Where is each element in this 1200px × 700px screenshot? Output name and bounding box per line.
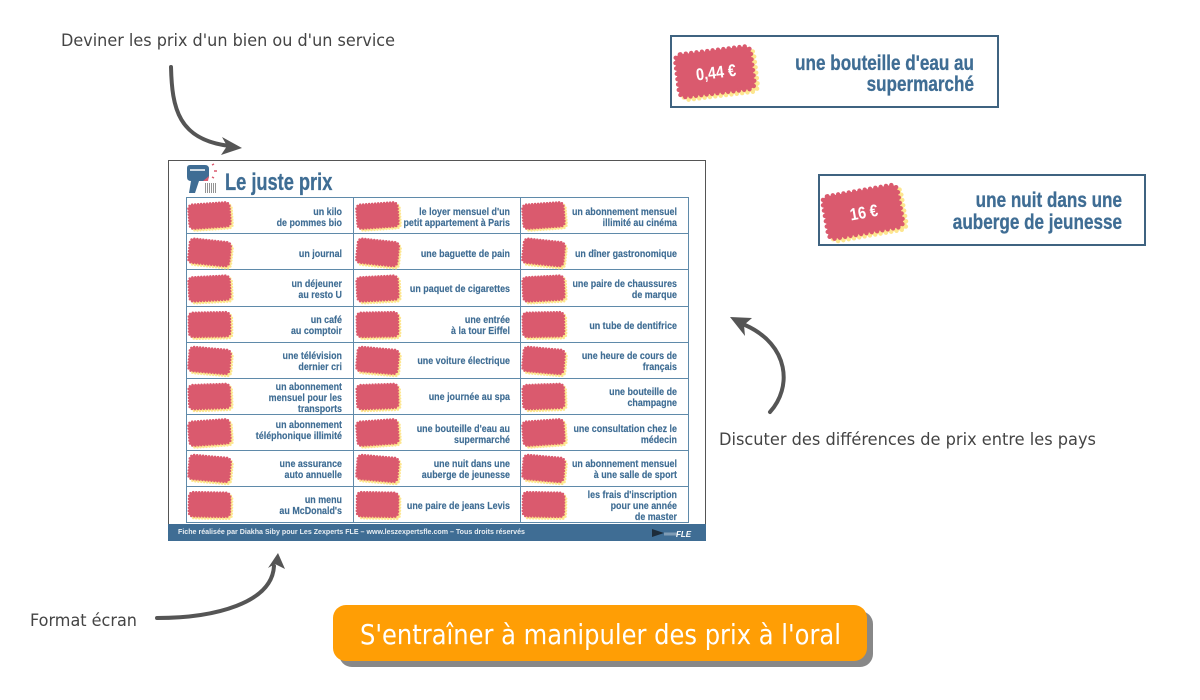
footer logo <box>652 529 692 539</box>
cell: un journal: un journal <box>299 248 342 260</box>
cell: une paire de chaussures de marque <box>522 275 678 304</box>
card text: supermarché <box>867 73 974 96</box>
cell: une consultation chez le médecin: médecin <box>641 434 677 446</box>
button banner <box>333 605 873 667</box>
cell: un abonnement mensuel pour les transports <box>189 381 343 415</box>
cell: un abonnement mensuel à une salle de sport: un abonnement mensuel <box>572 458 677 470</box>
cell: une bouteille d'eau au supermarché: une bouteille d'eau au <box>417 423 510 435</box>
cell: une heure de cours de français <box>522 347 678 376</box>
worksheet title: Le juste prix <box>225 169 332 196</box>
cell: le loyer mensuel d'un petit appartement à Paris: le loyer mensuel d'un <box>419 206 510 218</box>
label: discuss differences: Discuter des différences de prix entre les pays <box>719 430 1096 450</box>
cell: un déjeuner au resto U <box>188 275 342 304</box>
cell: une assurance auto annuelle: une assurance <box>280 458 343 470</box>
cell: une paire de chaussures de marque: une paire de chaussures <box>572 278 678 290</box>
cell: une heure de cours de français: français <box>643 361 678 373</box>
arrow: to format label <box>157 553 285 618</box>
arrow: from price discussion <box>730 317 784 412</box>
cell: une baguette de pain: une baguette de pain <box>421 248 510 260</box>
footer logo: FLE <box>676 530 692 539</box>
cell: une voiture électrique: une voiture électrique <box>417 355 511 367</box>
cell: un café au comptoir: au comptoir <box>291 325 342 337</box>
cell: une entrée à la tour Eiffel: une entrée <box>465 314 511 326</box>
footer bar <box>168 524 706 541</box>
cell: un paquet de cigarettes: un paquet de cigarettes <box>410 283 511 295</box>
cell: un tube de dentifrice: un tube de dentifrice <box>589 320 678 332</box>
cell: une bouteille d'eau au supermarché: supermarché <box>454 434 511 446</box>
label: guess prices: Deviner les prix d'un bien ou d'un service <box>61 31 395 51</box>
cell: une voiture électrique <box>356 347 511 376</box>
cell: un abonnement mensuel illimité au cinéma: un abonnement mensuel <box>572 206 677 218</box>
card text <box>795 52 974 96</box>
cell: un café au comptoir <box>189 312 343 339</box>
cell: une journée au spa <box>357 384 511 411</box>
cell: une nuit dans une auberge de jeunesse <box>356 455 511 484</box>
card: water bottle example <box>671 36 998 107</box>
cell: une nuit dans une auberge de jeunesse: auberge de jeunesse <box>422 469 511 481</box>
cell: une entrée à la tour Eiffel: à la tour Eiffel <box>451 325 510 337</box>
cell: un kilo de pommes bio: de pommes bio <box>277 217 342 229</box>
cell: une bouteille d'eau au supermarché <box>356 419 511 448</box>
cell: une télévision dernier cri <box>188 347 342 376</box>
cell: un café au comptoir: un café <box>311 314 343 326</box>
cell: un menu au McDonald's: un menu <box>305 494 342 506</box>
cell: une entrée à la tour Eiffel <box>357 312 511 339</box>
cell: un abonnement mensuel à une salle de sport: à une salle de sport <box>594 469 678 481</box>
cell: un dîner gastronomique <box>522 238 678 269</box>
cell: une paire de jeans Levis: une paire de jeans Levis <box>407 500 511 512</box>
cell: les frais d'inscription pour une année de master: de master <box>635 511 677 523</box>
cell: un menu au McDonald's: au McDonald's <box>279 505 343 517</box>
cell: un abonnement téléphonique illimité <box>188 419 343 448</box>
cell: une journée au spa: une journée au spa <box>429 391 511 403</box>
price table grid <box>186 197 688 522</box>
cell: une paire de jeans Levis <box>357 492 511 519</box>
cell: une heure de cours de français: une heure de cours de <box>582 350 678 362</box>
card text <box>953 189 1122 234</box>
cell: un kilo de pommes bio <box>188 202 342 231</box>
cell: le loyer mensuel d'un petit appartement à Paris <box>356 202 511 231</box>
card text: une bouteille d'eau au <box>795 52 974 75</box>
label: screen format: Format écran <box>30 611 137 631</box>
cell: un dîner gastronomique: un dîner gastronomique <box>575 248 678 260</box>
cell: une assurance auto annuelle: auto annuelle <box>285 469 343 481</box>
card text: une nuit dans une <box>976 189 1122 212</box>
cell: un déjeuner au resto U: un déjeuner <box>291 278 342 290</box>
cell: un abonnement téléphonique illimité: téléphonique illimité <box>256 430 343 442</box>
icon: barcode scanner <box>187 164 217 193</box>
cell: un abonnement téléphonique illimité: un abonnement <box>276 419 343 431</box>
cell: un abonnement mensuel illimité au cinéma <box>522 202 678 231</box>
cell: un abonnement mensuel pour les transports: transports <box>298 403 343 415</box>
banner text: S'entraîner à manipuler des prix à l'oral <box>360 618 841 651</box>
footer credit: Fiche réalisée par Diakha Siby pour Les Zexperts FLE – www.leszexpertsfle.com – Tous droits réservés <box>178 527 525 536</box>
cell: les frais d'inscription pour une année de master <box>523 489 678 523</box>
cell: le loyer mensuel d'un petit appartement à Paris: petit appartement à Paris <box>403 217 511 229</box>
cell: les frais d'inscription pour une année de master: les frais d'inscription <box>588 489 677 501</box>
cell: une télévision dernier cri: dernier cri <box>298 361 342 373</box>
cell: un kilo de pommes bio: un kilo <box>313 206 342 218</box>
cell: une bouteille de champagne: une bouteille de <box>609 386 678 398</box>
price stamp: 16 € <box>822 184 907 243</box>
cell: une paire de chaussures de marque: de marque <box>632 289 678 301</box>
cell: un paquet de cigarettes <box>356 275 511 304</box>
cell: un abonnement mensuel pour les transports: mensuel pour les <box>269 392 343 404</box>
cell: une télévision dernier cri: une télévision <box>283 350 342 362</box>
cell: une consultation chez le médecin: une consultation chez le <box>573 423 678 435</box>
cell: une nuit dans une auberge de jeunesse: une nuit dans une <box>434 458 511 470</box>
cell: les frais d'inscription pour une année de master: pour une année <box>611 500 678 512</box>
card: hostel night example <box>819 175 1145 245</box>
cell: un abonnement mensuel illimité au cinéma: illimité au cinéma <box>603 217 678 229</box>
cell: un abonnement mensuel à une salle de sport <box>522 455 678 484</box>
arrow: to worksheet top <box>171 67 242 155</box>
cell: une bouteille de champagne <box>523 384 678 411</box>
card text: auberge de jeunesse <box>953 211 1122 234</box>
price stamp: 0,44 € <box>674 45 759 101</box>
price stamp: 0,44 €: 0,44 € <box>695 62 737 85</box>
cell: un menu au McDonald's <box>189 492 343 519</box>
cell: une assurance auto annuelle <box>188 455 343 484</box>
cell: une consultation chez le médecin <box>522 419 678 448</box>
price stamp: 16 €: 16 € <box>849 202 880 225</box>
cell: une baguette de pain <box>356 238 510 269</box>
cell: un journal <box>188 238 342 269</box>
cell: un déjeuner au resto U: au resto U <box>298 289 342 301</box>
cell: un tube de dentifrice <box>523 312 678 339</box>
cell: une bouteille de champagne: champagne <box>627 397 678 409</box>
worksheet panel <box>168 160 706 541</box>
cell: un abonnement mensuel pour les transports: un abonnement <box>276 381 343 393</box>
